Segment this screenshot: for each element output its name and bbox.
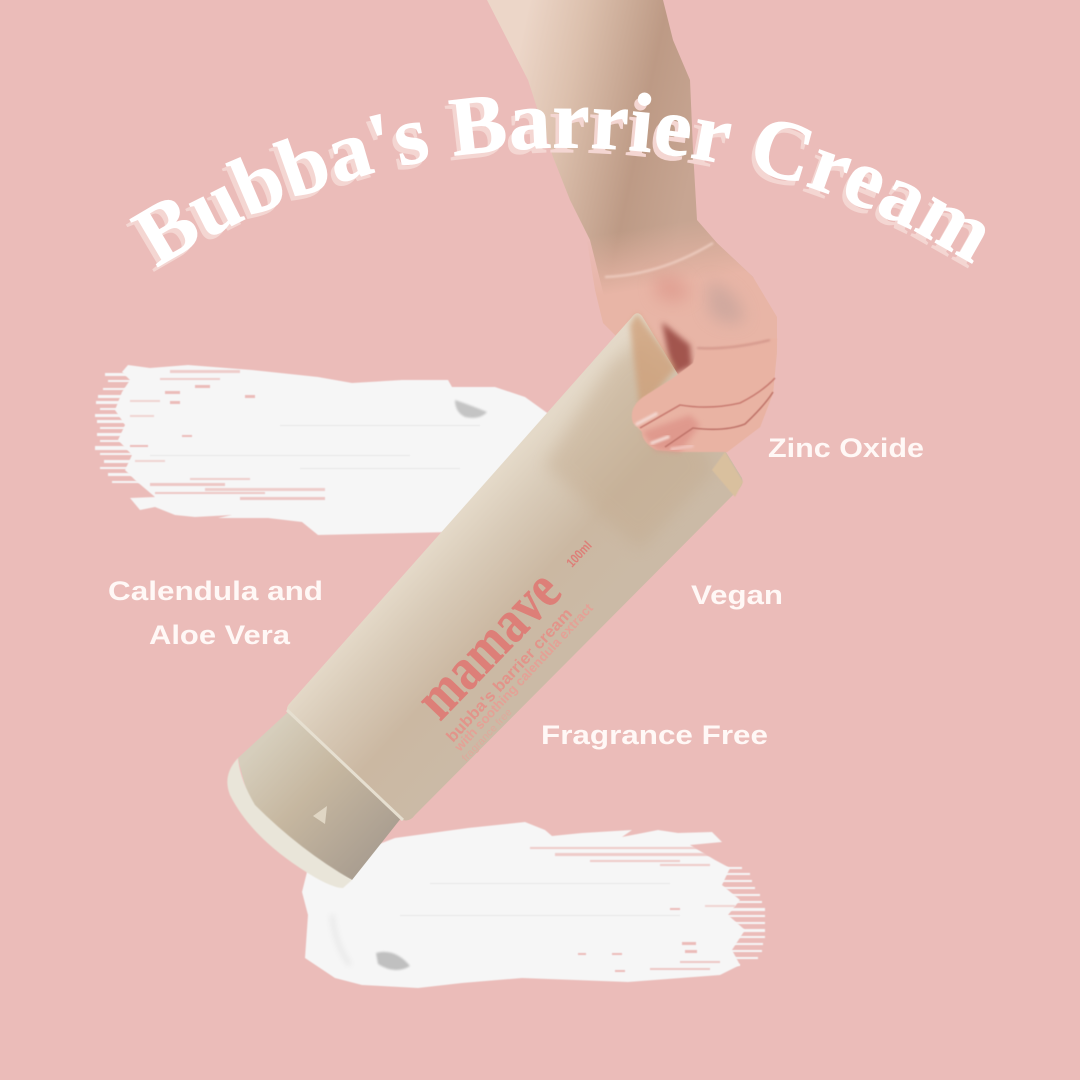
title [126,92,985,272]
cap rim [227,758,352,888]
label: Calendula and Aloe Vera: Aloe Vera [149,620,291,650]
volume: 100ml [563,538,595,570]
palm [580,215,777,452]
product name: bubba's barrier cream [443,605,576,746]
tube label [402,538,596,764]
cream swatch: upper left [95,365,560,535]
finger nails [637,414,656,424]
knuckle crease [697,340,770,348]
brand name: mamave [402,557,573,731]
crimped seal [630,313,676,410]
cap [227,710,403,888]
crease: finger two and three [665,392,773,447]
fragrance note: fragrance free [460,706,515,764]
palm shading [708,280,745,324]
finger silhouette [632,338,777,452]
title shadow: Bubba's Barrier Cream [126,98,972,272]
label: Vegan: Vegan [691,580,783,610]
forearm [487,0,762,320]
cap body [238,712,402,880]
tube upper shading [545,340,715,550]
label: Calendula and Aloe Vera: Calendula and [108,576,323,606]
title text: Bubba's Barrier Cream [129,92,985,268]
tube [227,313,743,888]
fingertip shading [642,415,700,452]
fingers [632,338,777,452]
forearm and hand palm [487,0,777,452]
product description: with soothing calendula extract [451,600,596,755]
tube body [287,313,742,820]
cap notch [313,806,327,824]
cap shoulder [287,710,403,820]
thumb gap [662,322,692,375]
label: Zinc Oxide: Zinc Oxide [768,433,924,463]
cream swatch: lower right [302,822,765,988]
label: Calendula and Aloe Vera [108,576,323,650]
label: Fragrance Free: Fragrance Free [541,720,768,750]
crease: finger one and two [640,378,775,428]
